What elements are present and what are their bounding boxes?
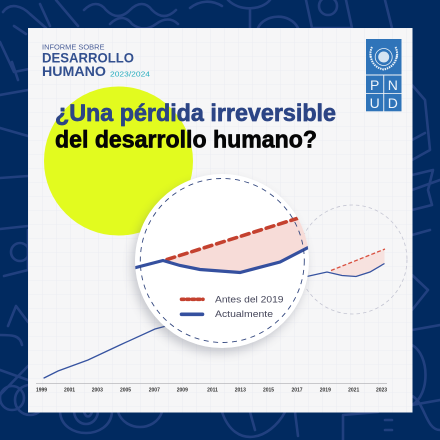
axis labels: 2005 (120, 388, 131, 394)
title (55, 100, 336, 154)
axis labels (36, 388, 387, 394)
panel: paper card (28, 28, 412, 412)
title: del desarrollo humano? (55, 126, 317, 154)
axis labels: 2013 (235, 388, 246, 394)
report heading (42, 44, 150, 79)
icon: UN PNUD logo (366, 39, 402, 111)
axis labels: 2021 (348, 388, 359, 394)
yellow circle (44, 86, 193, 236)
report heading: 2023/2024 (110, 72, 150, 78)
gap area (331, 249, 384, 276)
axis labels: 2019 (320, 388, 331, 394)
title: ¿Una pérdida irreversible (55, 100, 336, 127)
actual trend line right (300, 264, 384, 278)
legend (182, 294, 284, 319)
axis labels: 1999 (36, 388, 47, 394)
magnifier dashed ring (140, 178, 304, 342)
icon: UN PNUD logo: D (388, 95, 398, 111)
report heading: HUMANO (42, 63, 106, 79)
axis labels: 2001 (64, 388, 75, 394)
axis labels: 2007 (149, 388, 160, 394)
magnifier shadow (132, 179, 306, 353)
magnifier callout (132, 174, 310, 353)
zoomed chart (134, 214, 310, 272)
report heading: INFORME SOBRE (42, 44, 105, 52)
magnifier disc (135, 174, 309, 348)
axis labels: 2015 (263, 388, 274, 394)
line chart (36, 205, 407, 394)
legend: Antes del 2019 (215, 294, 284, 304)
axis labels: 2011 (207, 388, 218, 394)
small dashed circle (298, 205, 407, 314)
icon: UN PNUD logo: N (388, 77, 398, 93)
pre-2019 dashed projection (331, 249, 385, 270)
icon: UN PNUD logo: P (370, 77, 379, 93)
axis labels: 2003 (92, 388, 103, 394)
legend: Actualmente (215, 309, 273, 319)
report heading: DESARROLLO (42, 50, 134, 66)
axis labels: 2023 (376, 388, 387, 394)
actual trend line left (44, 325, 170, 378)
icon: UN PNUD logo: U (370, 95, 380, 111)
axis labels: 2009 (177, 388, 188, 394)
x axis (36, 382, 387, 384)
axis labels: 2017 (291, 388, 303, 394)
